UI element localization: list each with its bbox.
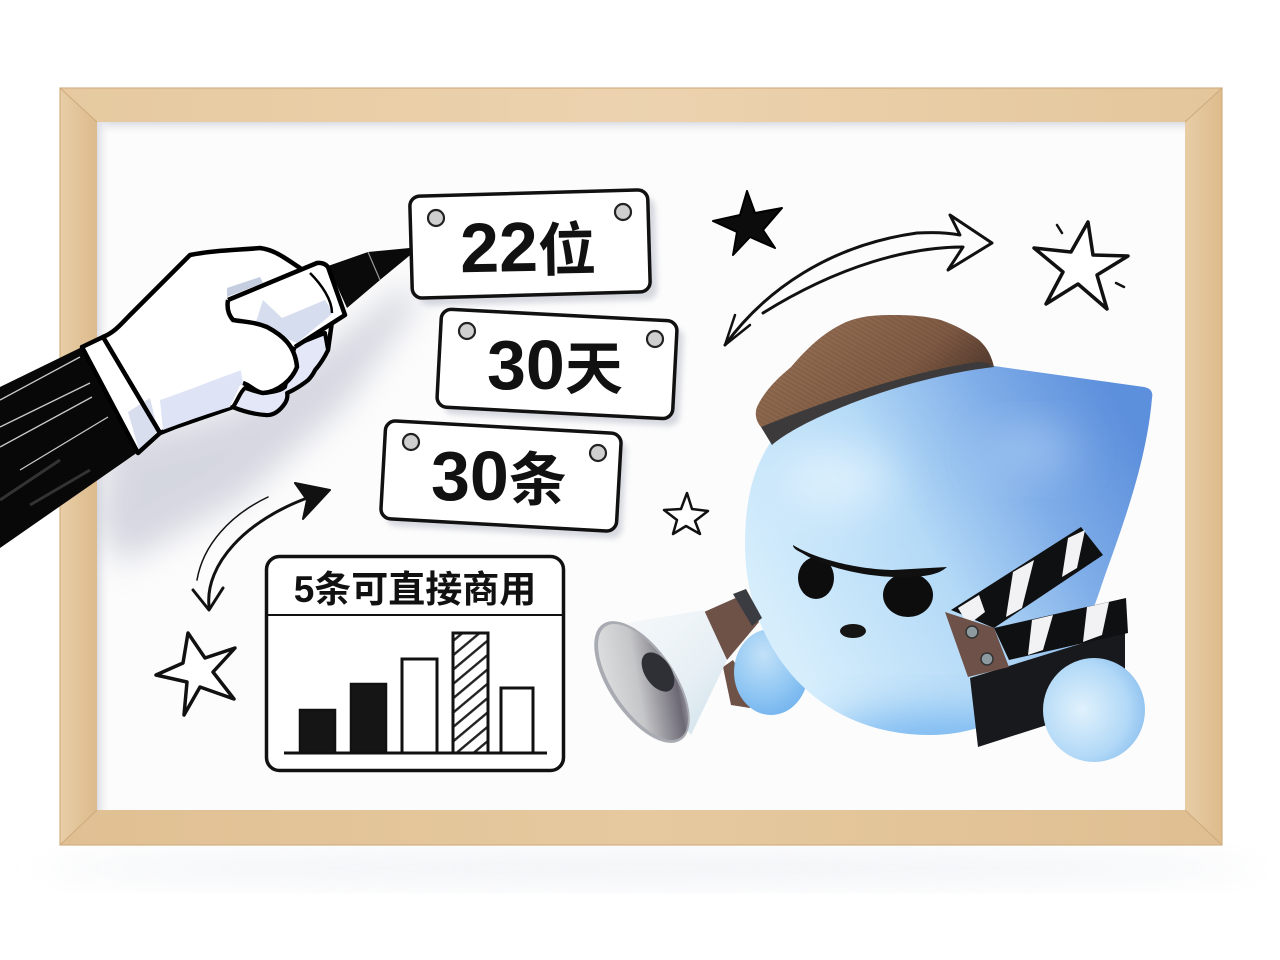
icon: gloved hand back xyxy=(103,248,335,433)
stat tag: 22位: 22位 xyxy=(459,207,597,287)
icon: left hand sphere xyxy=(734,629,808,715)
icon: outline star bottom left xyxy=(156,633,235,715)
stat tag: 30条: 30条 xyxy=(431,437,567,515)
finger xyxy=(228,300,297,393)
floor shadow xyxy=(40,854,1260,882)
wooden frame xyxy=(60,88,1222,845)
droplet mascot xyxy=(575,315,1152,777)
megaphone strap xyxy=(723,660,758,708)
icon: clapperboard xyxy=(945,527,1128,747)
droplet shading and highlights xyxy=(780,428,1075,777)
icon: black striped sleeve xyxy=(0,347,138,548)
icon: small outline star xyxy=(664,493,708,534)
stat tag: 30天 xyxy=(436,309,684,426)
arrow: upper right curved double arrow xyxy=(725,215,992,345)
droplet body xyxy=(745,365,1152,735)
icon: thumb block xyxy=(227,277,263,297)
chart card: 5条可直接商用 xyxy=(266,556,564,770)
glove shading xyxy=(160,362,283,430)
arrow: lower left curved double arrow xyxy=(193,483,330,610)
icon: outline star top right xyxy=(1034,222,1128,309)
icon: marker pen xyxy=(228,247,420,347)
icon: right hand sphere xyxy=(1043,658,1145,762)
eyes xyxy=(798,557,834,599)
stat tag: 22位 xyxy=(410,190,658,306)
eyebrow xyxy=(793,545,947,577)
stat tag: 30条 xyxy=(380,420,628,539)
knuckles xyxy=(233,333,328,415)
icon: solid black star xyxy=(713,191,782,255)
face xyxy=(793,545,947,638)
tag card xyxy=(410,190,658,306)
icon: white cuff xyxy=(82,337,160,453)
stat tag: 30天: 30天 xyxy=(487,326,623,404)
bar chart xyxy=(284,633,547,753)
icon: flat cap xyxy=(756,315,994,445)
icon: megaphone xyxy=(575,589,762,758)
tag card xyxy=(380,420,628,539)
hand shadow on board xyxy=(97,285,420,565)
card heading: 5条可直接商用 xyxy=(294,569,536,610)
tag card xyxy=(436,309,684,426)
hand holding marker xyxy=(0,247,420,548)
mouth xyxy=(840,624,866,638)
